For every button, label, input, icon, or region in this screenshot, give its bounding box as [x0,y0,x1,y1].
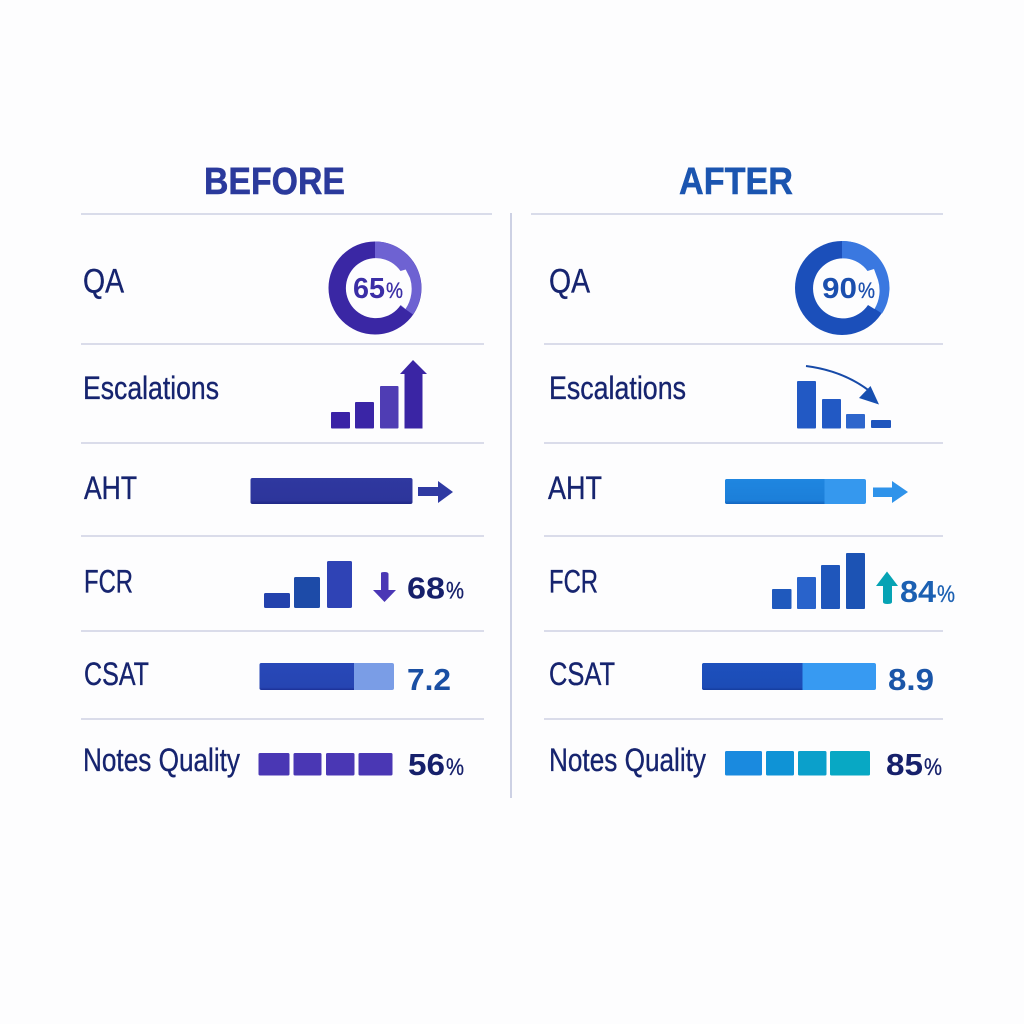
heading: after: AFTER [679,161,793,203]
label: Escalations after: Escalations [549,370,686,406]
arrow: AHT after [873,481,908,503]
value: FCR 84%: 84 [900,574,937,609]
donut: QA 65%: % [386,278,403,303]
bar: AHT after [725,479,866,504]
label: Escalations before: Escalations [83,370,219,406]
label: QA after: QA [549,262,590,300]
bar: Notes Quality segments after [725,751,870,776]
value: FCR 84%: % [937,581,955,608]
donut: QA 65% [328,242,422,334]
label: CSAT before: CSAT [84,656,149,692]
value: FCR 68%: 68 [407,570,445,606]
value: Notes Quality 56%: 56 [408,747,445,782]
arrow: FCR up [876,572,898,604]
panel: before [83,161,464,782]
bar: AHT before [250,478,412,504]
value: FCR 68%: % [446,578,464,604]
value: Notes Quality 85%: 85 [886,747,923,782]
label: CSAT after: CSAT [549,656,615,692]
bar: CSAT before [260,663,394,690]
label: FCR after: FCR [549,564,598,600]
label: AHT before: AHT [84,470,137,506]
value: CSAT 8.9: 8.9 [888,662,934,697]
heading: before: BEFORE [204,161,345,203]
label: Notes Quality before: Notes Quality [83,742,240,778]
label: Notes Quality after: Notes Quality [549,742,706,778]
arrow: AHT before [418,481,453,503]
chart: FCR bars before [264,561,352,608]
value: Notes Quality 56%: % [446,754,464,781]
donut: QA 65%: 65 [353,273,385,305]
bar: CSAT after [702,663,876,690]
label: AHT after: AHT [548,470,602,506]
donut: QA 90%: 90 [822,273,857,305]
chart: escalations falling bars with down arrow [797,366,891,428]
label: FCR before: FCR [84,564,133,600]
value: CSAT 7.2: 7.2 [407,662,451,697]
donut: QA 90%: % [858,278,875,303]
donut: QA 90% [795,241,890,335]
chart: FCR bars after [772,553,865,609]
bar: Notes Quality segments before [258,753,392,776]
value: Notes Quality 85%: % [924,754,942,781]
panel: after [548,161,955,782]
arrow: FCR down [373,572,396,602]
chart: escalations rising bars with up arrow [331,360,427,428]
label: QA before: QA [83,262,124,300]
